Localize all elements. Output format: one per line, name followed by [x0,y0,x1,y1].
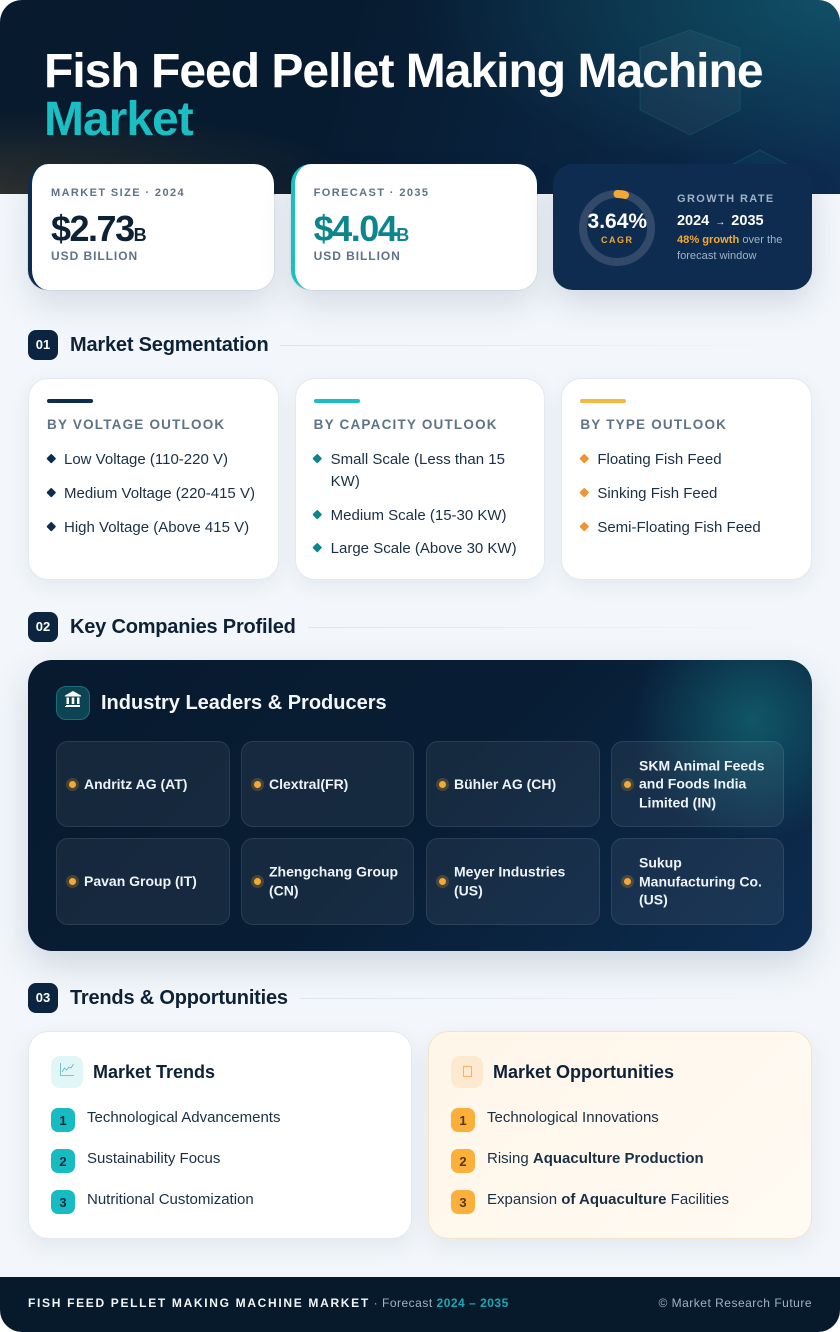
panel: type outlook: BY TYPE OUTLOOK [580,417,727,432]
panel heading: Industry Leaders & Producers [101,692,387,714]
panel: capacity outlook: KW) [331,473,360,490]
company: Bühler AG (CH) [454,775,556,791]
company: Clextral(FR) [269,775,348,791]
stat card: market size: $2.73B [51,208,147,249]
decorative hexagon [640,30,740,136]
panel: voltage outlook [28,378,279,580]
panel: market opportunities: Expansion of Aquaculture Facilities [487,1191,729,1208]
panel: voltage outlook: High Voltage (Above 415 V) [64,519,249,536]
section heading 02 [28,612,296,642]
company: SKM Animal Feeds and Foods India Limited (IN) [639,757,765,810]
section heading 01 [28,330,268,360]
title [44,45,763,146]
section heading 01: 01 [36,337,50,352]
growth rate card [553,164,812,290]
growth note: 48% growth over the forecast window [677,234,782,262]
panel: capacity outlook: Medium Scale (15-30 KW) [331,507,507,524]
panel: market trends [28,1031,412,1239]
panel: market trends: Sustainability Focus [87,1150,220,1167]
company: Zhengchang Group (CN) [269,864,398,898]
footer title: FISH FEED PELLET MAKING MACHINE MARKET · Forecast 2024 – 2035 [28,1296,509,1310]
stat card: forecast: $4.04B [314,208,409,249]
section heading 03: 03 [36,990,50,1005]
CAGR ring [579,190,655,266]
company [241,741,414,827]
company [241,838,414,925]
panel: voltage outlook: BY VOLTAGE OUTLOOK [47,417,225,432]
icon: institution [56,686,90,720]
panel: market trends: 2 [59,1154,67,1169]
hero banner [0,0,840,194]
icon: line chart [51,1056,83,1088]
section heading 02: Key Companies Profiled [70,616,296,638]
decorative lower hexagon [732,150,788,164]
stat card: market size: MARKET SIZE · 2024 [51,187,185,199]
panel: market trends: 1 [59,1113,67,1128]
panel: key companies [28,660,812,951]
panel: market opportunities: Technological Innovations [487,1109,659,1126]
panel: type outlook: Sinking Fish Feed [597,485,717,502]
panel: capacity outlook: Large Scale (Above 30 KW) [331,540,517,557]
footer [0,1277,840,1332]
section heading 03 [28,983,288,1013]
panel: market opportunities: Rising Aquaculture Production [487,1150,704,1167]
year range: 2024 → 2035 [677,213,764,229]
panel: capacity outlook: BY CAPACITY OUTLOOK [314,417,498,432]
panel: type outlook: Semi-Floating Fish Feed [597,519,761,536]
stat card: forecast: USD BILLION [314,249,401,263]
section heading 01: Market Segmentation [70,334,268,356]
company: Andritz AG (AT) [84,775,187,791]
panel: capacity outlook [295,378,545,580]
title: Market [44,93,193,146]
panel: voltage outlook: Low Voltage (110-220 V) [64,451,228,468]
company: Meyer Industries (US) [454,864,565,898]
growth rate label: GROWTH RATE [677,193,775,205]
panel: capacity outlook: Small Scale (Less than 15 [331,451,505,468]
panel: market opportunities: Market Opportunities [493,1062,674,1082]
panel: market opportunities [428,1031,812,1239]
icon: opportunity glyph [451,1056,483,1088]
stat card: forecast: FORECAST · 2035 [314,187,429,199]
company [426,838,600,925]
stat card: market size [28,164,274,290]
CAGR label: CAGR [601,235,634,245]
footer credit: © Market Research Future [658,1296,812,1310]
panel: market trends: Market Trends [93,1062,215,1082]
panel: market opportunities: 3 [459,1195,467,1210]
company [426,741,600,827]
section heading 03: Trends & Opportunities [70,987,288,1009]
company [611,838,784,925]
section heading 02: 02 [36,619,50,634]
panel: market trends: Nutritional Customization [87,1191,254,1208]
panel: market opportunities: 2 [459,1154,467,1169]
panel: market trends: Technological Advancements [87,1109,280,1126]
panel: market trends: 3 [59,1195,67,1210]
stat card: forecast [291,164,537,290]
panel: voltage outlook: Medium Voltage (220-415 V) [64,485,255,502]
panel: market opportunities: 1 [459,1113,467,1128]
company: Sukup Manufacturing Co. (US) [639,854,762,907]
panel: type outlook [561,378,812,580]
company [56,741,230,827]
company [56,838,230,925]
company: Pavan Group (IT) [84,873,197,889]
company [611,741,784,827]
stat card: market size: USD BILLION [51,249,138,263]
title: Fish Feed Pellet Making Machine [44,45,763,98]
panel: type outlook: Floating Fish Feed [597,451,722,468]
CAGR value: 3.64% [588,210,647,233]
